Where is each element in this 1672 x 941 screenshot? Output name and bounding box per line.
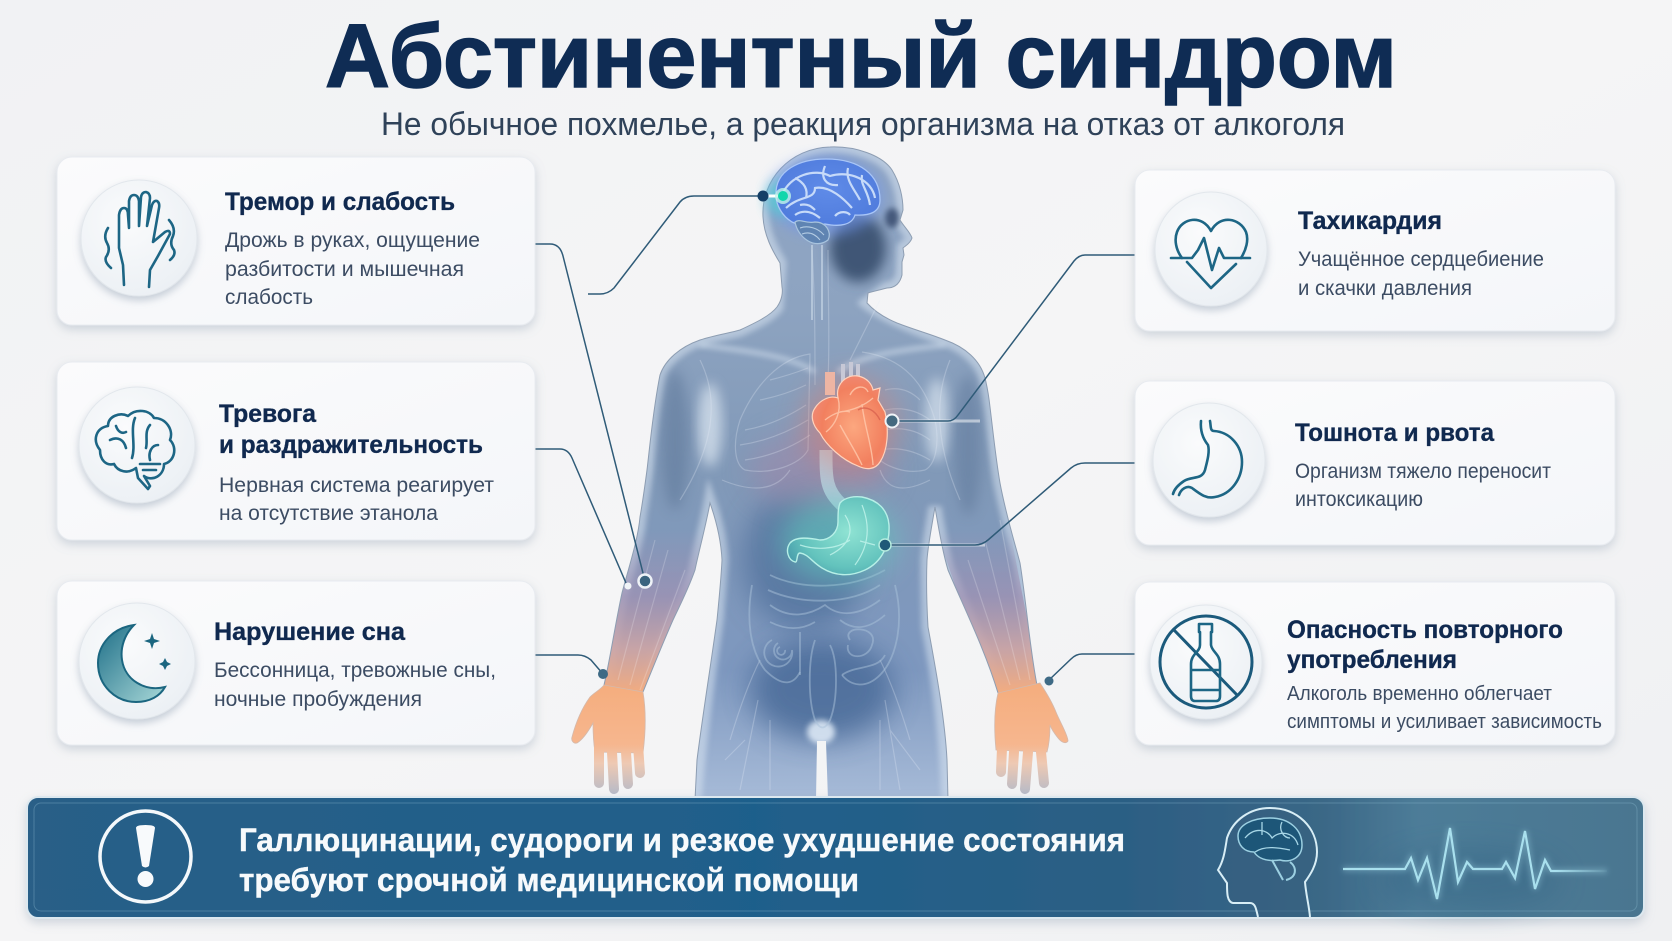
description: Алкоголь временно облегчает: [1287, 683, 1552, 705]
connector: nausea: [879, 463, 1135, 551]
title: Абстинентный синдром: [325, 7, 1397, 107]
connector: tachycardia: [886, 255, 1135, 428]
description: Учащённое сердцебиение: [1298, 248, 1544, 271]
heading: Нарушение сна: [214, 618, 406, 646]
description: Бессонница, тревожные сны,: [214, 659, 496, 682]
alert text: требуют срочной медицинской помощи: [239, 862, 859, 898]
description: Нервная система реагирует: [219, 474, 494, 497]
connector: brain: [588, 188, 791, 294]
panel: relapse danger: [1135, 582, 1615, 745]
face shadow: [830, 214, 886, 282]
brain glow: [767, 156, 883, 236]
icon: stomach: [1153, 403, 1265, 517]
heading: Тревога: [219, 400, 317, 428]
left hand: [572, 685, 645, 789]
icon: heart with pulse: [1155, 192, 1267, 306]
pulse line: [1343, 828, 1607, 899]
heading: и раздражительность: [219, 431, 483, 459]
connector: anxiety: [535, 449, 632, 590]
human body figure: [572, 147, 1068, 800]
panel: tremor and weakness: [57, 157, 535, 325]
forearm tint: [604, 545, 700, 692]
body shading: [600, 147, 1042, 800]
intestines: [749, 570, 899, 728]
panel: nausea and vomiting: [1135, 381, 1615, 545]
description: разбитости и мышечная: [225, 258, 464, 281]
icon: exclamation mark: [100, 811, 191, 902]
icon: moon and stars: [79, 603, 195, 719]
heading: Тошнота и рвота: [1295, 419, 1495, 447]
organ outlines: lungs, trachea, ribs: [680, 250, 960, 790]
alert text: Галлюцинации, судороги и резкое ухудшение состояния: [239, 822, 1125, 858]
icon: crossed-out bottle: [1150, 605, 1262, 719]
alert banner: [27, 797, 1644, 918]
body silhouette: [604, 147, 1037, 800]
body outline: [604, 147, 1037, 800]
connector: tremor to forearm: [535, 244, 652, 588]
panel: sleep disorder: [57, 581, 535, 745]
connector: sleep: [535, 655, 608, 679]
brain: [776, 159, 880, 320]
description: на отсутствие этанола: [219, 502, 438, 525]
stomach glow: [780, 498, 896, 582]
description: интоксикацию: [1295, 488, 1423, 511]
upper arm shadow: [661, 370, 689, 510]
description: Дрожь в руках, ощущение: [225, 229, 480, 252]
rim light: [604, 147, 1037, 800]
panel: tachycardia: [1135, 170, 1615, 331]
connector: relapse: [1044, 654, 1135, 686]
description: слабость: [225, 286, 313, 309]
description: симптомы и усиливает зависимость: [1287, 711, 1602, 733]
heading: Опасность повторного: [1287, 616, 1563, 644]
panel: anxiety and irritability: [57, 362, 535, 540]
heading: Тахикардия: [1298, 207, 1442, 235]
heart: [812, 362, 887, 469]
subtitle: Не обычное похмелье, а реакция организма на отказ от алкоголя: [381, 106, 1345, 142]
description: ночные пробуждения: [214, 688, 422, 711]
description: и скачки давления: [1298, 277, 1472, 300]
heading: Тремор и слабость: [225, 188, 455, 216]
esophagus: [826, 450, 842, 505]
icon: head with brain: [1218, 808, 1317, 917]
icon: hand: [81, 180, 197, 296]
right hand: [995, 683, 1068, 789]
icon: brain outline: [79, 387, 195, 503]
heart glow: [802, 377, 898, 473]
stomach: [788, 497, 889, 575]
heading: употребления: [1287, 646, 1457, 674]
chest highlights: [698, 383, 722, 467]
description: Организм тяжело переносит: [1295, 460, 1551, 483]
abdomen shadow: [743, 490, 867, 630]
